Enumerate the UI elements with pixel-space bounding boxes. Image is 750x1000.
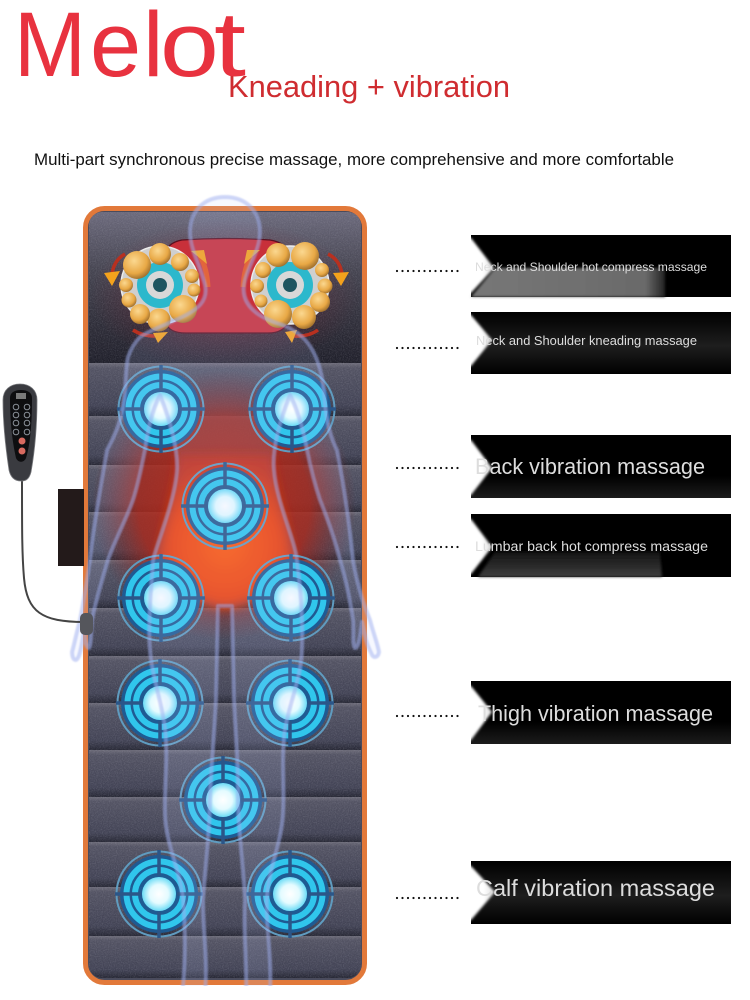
neck heating pillow (166, 238, 288, 333)
label: calf vibration: Calf vibration massage (476, 875, 715, 901)
label: neck and shoulder kneading (466, 312, 731, 374)
label: neck and shoulder kneading: Neck and Shoulder kneading massage (476, 334, 697, 348)
kneading head: left (119, 243, 200, 332)
heat glow: neck and shoulders (90, 220, 360, 370)
brand logo: Melot (14, 0, 246, 96)
massage mat (86, 208, 364, 982)
subtitle: Multi-part synchronous precise massage, more comprehensive and more comfortable (34, 151, 674, 169)
vibration pods (115, 365, 336, 938)
heat glow: lumbar, torso core (153, 455, 297, 608)
label: neck and shoulder hot compress: Neck and Shoulder hot compress massage (475, 260, 707, 274)
rotation arrows (104, 250, 349, 343)
heat glow: lumbar, wide (99, 378, 350, 632)
leader dots (397, 271, 459, 898)
label: thigh vibration: Thigh vibration massage (478, 701, 713, 726)
side pocket (58, 489, 84, 566)
label: back vibration (466, 435, 731, 498)
remote control with cable (3, 384, 93, 635)
heading: Kneading + vibration: Kneading + vibration (228, 69, 510, 104)
label: thigh vibration (466, 681, 731, 744)
label: calf vibration (466, 861, 731, 924)
translucent human body outline (72, 197, 379, 995)
label: neck and shoulder hot compress (466, 235, 731, 297)
label: back vibration: Back vibration massage (475, 454, 705, 479)
kneading head: right (250, 242, 332, 329)
label: lumbar back hot compress (466, 514, 731, 577)
label: lumbar back hot compress: Lumbar back hot compress massage (475, 539, 708, 554)
